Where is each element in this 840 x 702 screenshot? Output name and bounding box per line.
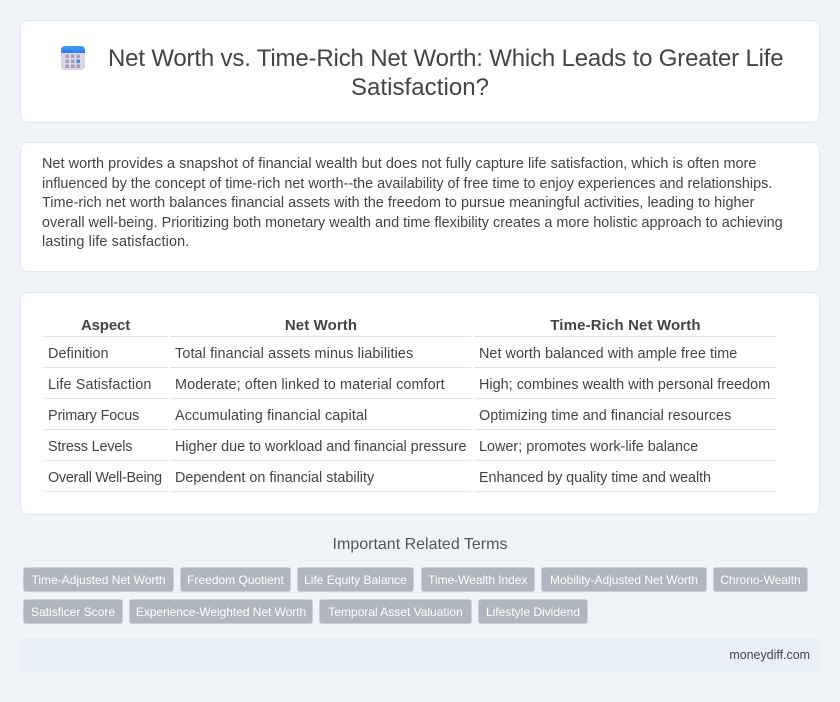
related terms tags: Experience-Weighted Net Worth [136,605,306,619]
comparison table: Lower; promotes work-life balance [479,439,698,455]
summary paragraph: influenced by the concept of time-rich net worth--the availability of free time to enjoy experiences and relationships. [42,176,772,192]
related terms tags: Chrono-Wealth [720,573,801,587]
related terms tags: Time-Adjusted Net Worth [31,573,166,587]
title second line: Satisfaction? [351,74,489,101]
related terms tags: Life Equity Balance [304,573,407,587]
related terms tags: Time-Wealth Index [428,573,527,587]
panel: summary [20,142,820,272]
related terms tags: Freedom Quotient [187,573,284,587]
related terms tags: Temporal Asset Valuation [328,605,463,619]
summary paragraph [42,156,783,250]
comparison table: Accumulating financial capital [175,408,367,424]
comparison table: Dependent on financial stability [175,470,374,486]
comparison table: High; combines wealth with personal freedom [479,377,770,393]
comparison table: Definition [48,346,109,362]
comparison table: Time-Rich Net Worth [550,317,701,334]
footer bar [20,638,820,672]
comparison table: Net Worth [285,317,357,334]
summary paragraph: Net worth provides a snapshot of financial wealth but does not fully capture life satisfaction, which is often more [42,156,756,172]
comparison table: Life Satisfaction [48,377,151,393]
comparison table: Aspect [81,317,130,334]
comparison table: Optimizing time and financial resources [479,408,731,424]
comparison table: Moderate; often linked to material comfort [175,377,445,393]
summary paragraph: Time-rich net worth balances financial assets with the freedom to pursue meaningful activities, leading to higher [42,195,754,211]
summary paragraph: overall well-being. Prioritizing both monetary wealth and time flexibility creates a more holistic approach to achieving [42,215,783,231]
comparison table: Enhanced by quality time and wealth [479,470,711,486]
related terms tags: Lifestyle Dividend [486,605,580,619]
source label: moneydiff.com [729,648,810,662]
comparison table: Net worth balanced with ample free time [479,346,737,362]
summary paragraph: lasting life satisfaction. [42,234,189,250]
related terms tags [23,567,808,624]
comparison table: Higher due to workload and financial pressure [175,439,466,455]
title: Net Worth vs. Time-Rich Net Worth: Which Leads to Greater Life [108,45,783,72]
comparison table: Stress Levels [48,439,132,455]
icon: calendar [61,46,85,70]
related terms tags: Mobility-Adjusted Net Worth [550,573,698,587]
comparison table: Primary Focus [48,408,139,424]
comparison table: Overall Well-Being [48,470,162,486]
comparison table: Total financial assets minus liabilities [175,346,413,362]
related terms heading: Important Related Terms [333,536,507,553]
comparison table [43,317,777,492]
related terms tags: Satisficer Score [31,605,115,619]
panel: comparison table [20,292,820,515]
header panel [20,20,820,123]
